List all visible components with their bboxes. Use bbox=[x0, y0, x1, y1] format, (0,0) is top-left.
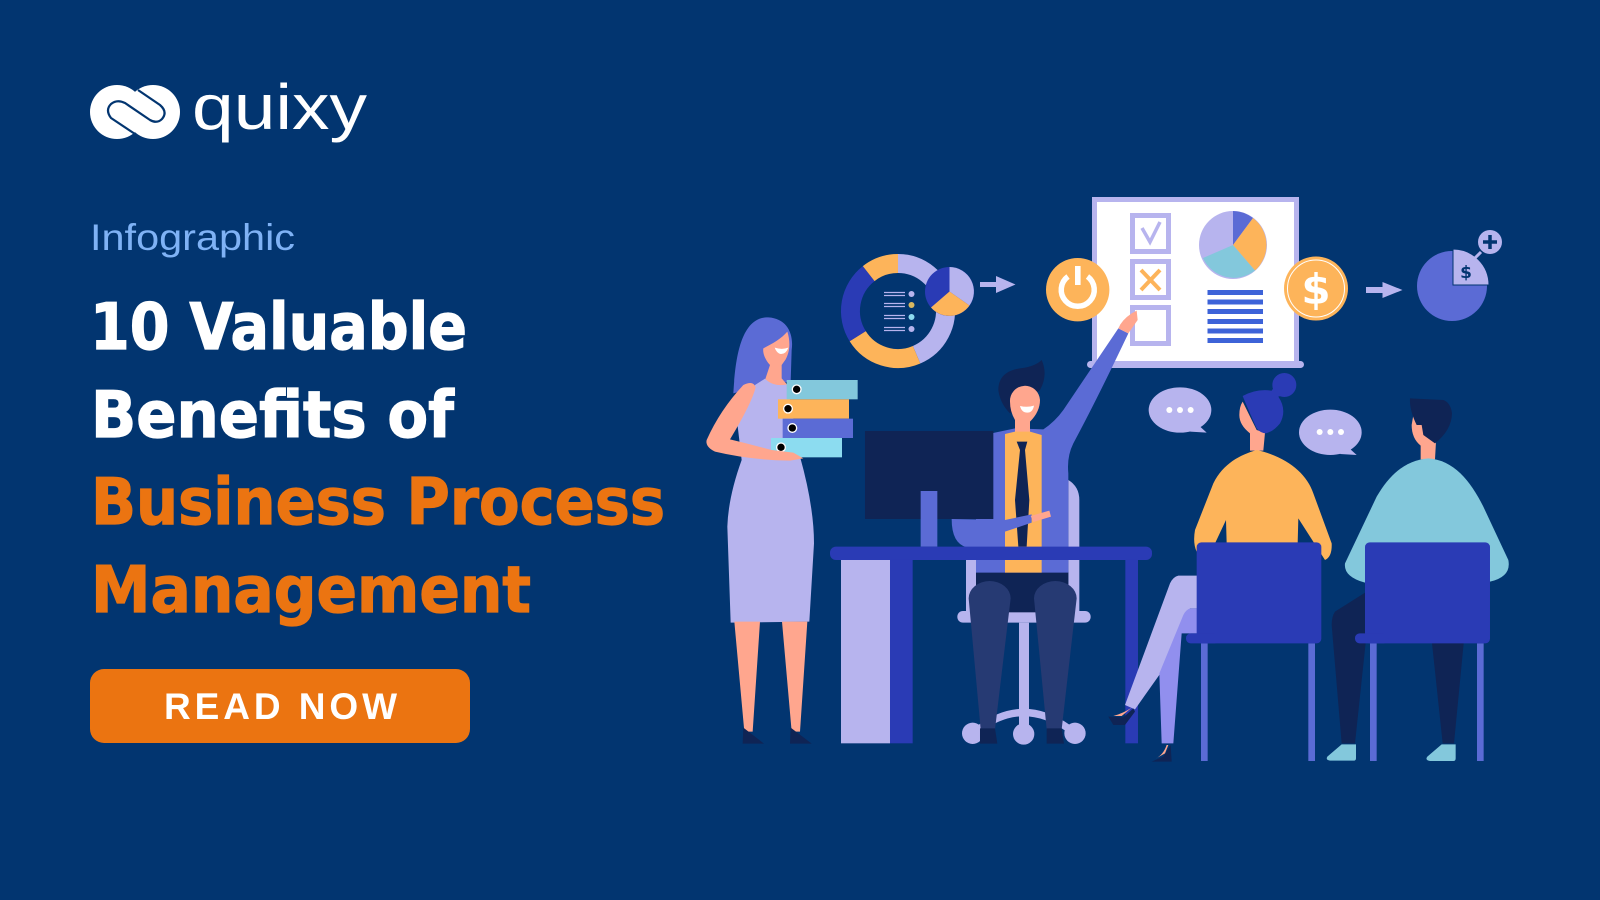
eyebrow: Infographic: Infographic bbox=[90, 217, 295, 258]
hair bbox=[733, 317, 792, 393]
arm bbox=[706, 383, 803, 461]
shoes bbox=[1108, 708, 1172, 762]
checkbox: tick bbox=[1132, 216, 1168, 252]
icon: power button bbox=[1046, 258, 1109, 321]
icon: magnifier bbox=[1472, 230, 1502, 261]
neck and face bbox=[1412, 415, 1436, 459]
chart: pie with dollar slice: $ bbox=[1460, 263, 1472, 283]
hair bbox=[1410, 398, 1452, 443]
person: woman with folders bbox=[706, 317, 858, 744]
monitor bbox=[865, 431, 1051, 547]
icon: quixy link mark bbox=[90, 85, 180, 139]
folders bbox=[771, 380, 858, 457]
icon: dollar coin: $ bbox=[1301, 265, 1331, 314]
shoes bbox=[1327, 744, 1456, 761]
button: read now bbox=[90, 669, 470, 743]
title: Benefits of bbox=[91, 379, 455, 453]
seat shadow bbox=[976, 572, 1068, 612]
forearm bbox=[952, 514, 1032, 547]
person: presenter man bbox=[976, 311, 1138, 612]
sweater bbox=[1194, 450, 1332, 560]
checkbox: empty bbox=[1132, 308, 1168, 344]
tie bbox=[1015, 442, 1029, 547]
checkbox: cross bbox=[1132, 262, 1168, 298]
chart: pie with dollar slice bbox=[1417, 230, 1502, 321]
title bbox=[90, 291, 665, 628]
desk bbox=[830, 547, 1152, 743]
legs bbox=[1332, 592, 1464, 743]
text lines bbox=[1208, 290, 1263, 343]
hand bbox=[1031, 511, 1051, 522]
icon: dollar coin bbox=[1284, 256, 1348, 320]
neck and face bbox=[1239, 402, 1265, 451]
hand raised bbox=[1118, 311, 1138, 333]
button: read now: READ NOW bbox=[164, 686, 397, 727]
small pie bbox=[925, 267, 974, 316]
chair: presenter bbox=[957, 480, 1091, 745]
chair: seated woman bbox=[1186, 542, 1321, 761]
smile bbox=[775, 348, 788, 354]
chair: seated man bbox=[1355, 542, 1490, 761]
dress bbox=[727, 379, 814, 623]
person: seated man bbox=[1299, 398, 1509, 761]
title: 10 Valuable bbox=[90, 291, 467, 365]
speech bubble bbox=[1149, 387, 1211, 433]
person: seated woman bbox=[1108, 373, 1332, 762]
front leg bbox=[1125, 576, 1197, 709]
legs bbox=[734, 622, 807, 732]
shoes bbox=[743, 728, 812, 744]
smile bbox=[1020, 406, 1034, 413]
arrow bbox=[980, 276, 1016, 293]
hair and bun bbox=[1243, 373, 1296, 433]
panel: whiteboard bbox=[1087, 200, 1304, 368]
torso and raised arm bbox=[976, 328, 1128, 573]
hair bbox=[998, 360, 1045, 413]
sweater bbox=[1345, 458, 1509, 583]
back leg bbox=[1159, 608, 1197, 743]
title: Management bbox=[91, 554, 531, 628]
vest bbox=[1005, 432, 1042, 573]
logo: quixy bbox=[90, 71, 367, 143]
arrow bbox=[1366, 282, 1402, 298]
presenter legs bbox=[969, 581, 1077, 744]
chart: donut with list bbox=[850, 264, 974, 359]
pie chart bbox=[1199, 211, 1267, 279]
wordmark: quixy bbox=[192, 71, 367, 143]
neck and face bbox=[1010, 386, 1040, 433]
speech bubble bbox=[1299, 410, 1362, 455]
title: Business Process bbox=[91, 466, 665, 540]
face bbox=[757, 332, 789, 386]
